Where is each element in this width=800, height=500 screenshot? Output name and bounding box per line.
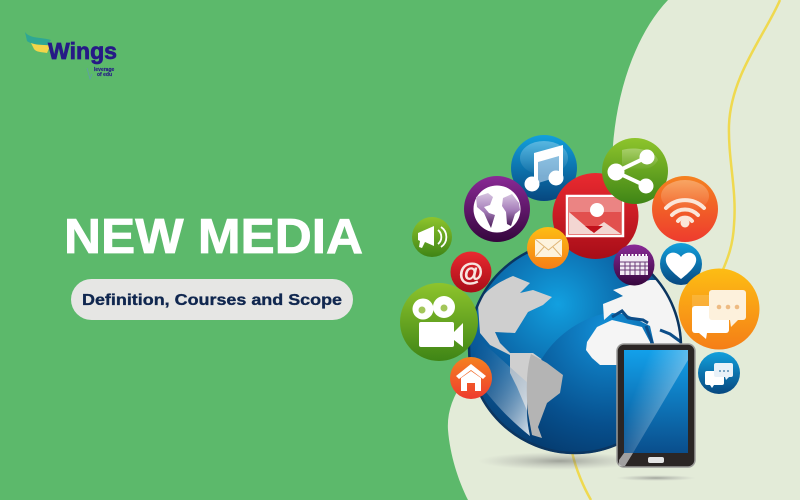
icon: heart [660, 243, 702, 285]
icon: at sign: @ [459, 259, 483, 287]
phone button [648, 457, 664, 463]
logo: Wings by leverage edu: of edu [97, 72, 112, 78]
light sliver [482, 348, 530, 436]
icon: video camera [400, 283, 478, 361]
title: NEW MEDIA [64, 210, 363, 264]
icon: house [450, 357, 492, 399]
icon: at sign [450, 252, 492, 292]
americas back [478, 276, 552, 410]
logo wordmark: Wings [48, 38, 117, 64]
south america front [527, 354, 563, 438]
icon: music note [511, 135, 577, 201]
subtitle text: Definition, Courses and Scope [82, 292, 342, 309]
inner sphere [527, 313, 654, 454]
icon: calendar [614, 244, 654, 286]
icon: mail [527, 227, 569, 269]
globe [468, 250, 682, 454]
africa [586, 320, 652, 365]
phone screen [624, 350, 688, 453]
phone [617, 344, 695, 467]
icon: purple world [464, 176, 530, 242]
icon: chat bubbles large [678, 268, 760, 350]
icon: wifi [652, 176, 718, 242]
pale background shape [448, 0, 800, 500]
icon: chat bubbles small [698, 352, 740, 394]
phone shadow [616, 475, 696, 481]
logo flag mark [25, 32, 51, 53]
seas [612, 311, 681, 345]
icon: share [602, 138, 668, 204]
icon: megaphone [412, 217, 452, 257]
yellow curved line [572, 0, 780, 500]
logo: Wings by leverage edu [25, 32, 117, 79]
logo sub-brand: leverage [94, 67, 115, 73]
globe shadow [478, 452, 642, 470]
icon: photo [552, 173, 638, 259]
eurasia [603, 280, 680, 344]
subtitle pill [71, 279, 353, 320]
phone glare [624, 350, 688, 453]
